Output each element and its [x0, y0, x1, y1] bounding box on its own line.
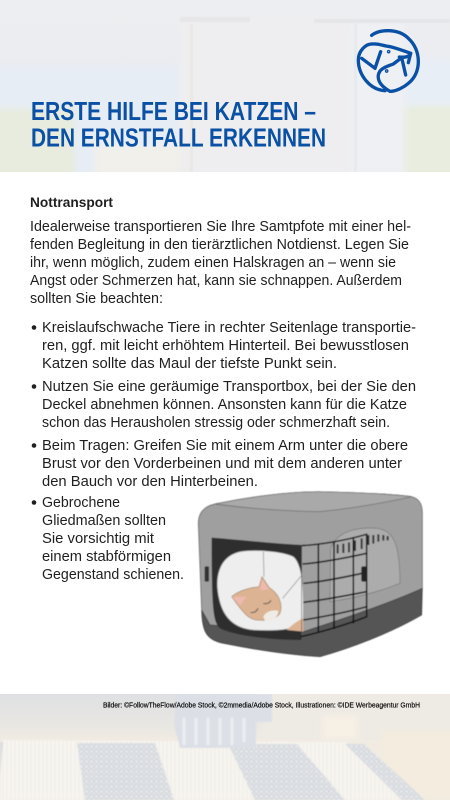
bullet: carrying: Brust vor den Vorderbeinen und mit dem anderen unter [42, 456, 402, 472]
vent slots [338, 534, 388, 553]
door opening [212, 538, 302, 640]
bullet: splints [32, 495, 184, 583]
white cushion [217, 551, 304, 630]
bullet: circulation: Kreislaufschwache Tiere in rechter Seitenlage transportie- [42, 320, 416, 336]
bullet: splints: einem stabförmigen [42, 549, 171, 565]
bullet: circulation: ren, ggf. mit leicht erhöhtem Hinterteil. Bei bewusstlosen [42, 338, 409, 354]
title [31, 98, 326, 152]
box body [198, 492, 422, 635]
box base [202, 588, 422, 657]
footer photo background [0, 690, 450, 800]
bullet: circulation: Katzen sollte das Maul der tiefste Punkt sein. [42, 356, 337, 372]
bullet: splints: Sie vorsichtig mit [42, 531, 154, 547]
box lid top [215, 492, 412, 512]
intro paragraph: fenden Begleitung in den tierärztlichen Notdienst. Legen Sie [30, 237, 409, 253]
section heading: Nottransport [30, 194, 113, 210]
bullet: carrying: Beim Tragen: Greifen Sie mit einem Arm unter die obere [42, 438, 408, 454]
door latches [361, 566, 367, 582]
title: ERSTE HILFE BEI KATZEN – [31, 98, 316, 126]
paw [287, 618, 303, 632]
wire door [301, 534, 367, 637]
intro paragraph: ihr, wenn möglich, zudem einen Halskragen an – wenn sie [30, 255, 396, 271]
illustration: cat in transport box [198, 492, 422, 657]
icon: dog and cat logo [358, 31, 418, 91]
intro paragraph [30, 219, 411, 307]
cat head [232, 577, 281, 620]
image credits: Bilder: ©FollowTheFlow/Adobe Stock, ©2mmedia/Adobe Stock, Illustrationen: ©IDE Werbeagentur GmbH [103, 700, 420, 710]
intro paragraph: Angst oder Schmerzen hat, kann sie schnappen. Außerdem [30, 273, 402, 289]
bullet: transport box: Nutzen Sie eine geräumige Transportbox, bei der Sie den [42, 379, 416, 395]
bullet: circulation [32, 320, 416, 372]
bullet: carrying: den Bauch vor den Hinterbeinen. [42, 474, 258, 490]
bullet: splints: Gebrochene [42, 495, 120, 511]
bullet: transport box [32, 379, 416, 431]
bullet: splints: Gegenstand schienen. [42, 567, 184, 583]
title: DEN ERNSTFALL ERKENNEN [31, 124, 326, 152]
header photo background [0, 0, 450, 181]
intro paragraph: sollten Sie beachten: [30, 291, 163, 307]
bullet: transport box: schon das Herausholen stressig oder schmerzhaft sein. [42, 415, 390, 431]
intro paragraph: Idealerweise transportieren Sie Ihre Samtpfote mit einer hel- [30, 219, 411, 235]
bullet: transport box: Deckel abnehmen können. Ansonsten kann für die Katze [42, 397, 407, 413]
bullet: carrying [32, 438, 408, 490]
open door frame [301, 545, 303, 640]
rug [0, 694, 425, 800]
bullet: splints: Gliedmaßen sollten [42, 513, 166, 529]
side window [330, 528, 400, 602]
tassel [174, 694, 272, 748]
